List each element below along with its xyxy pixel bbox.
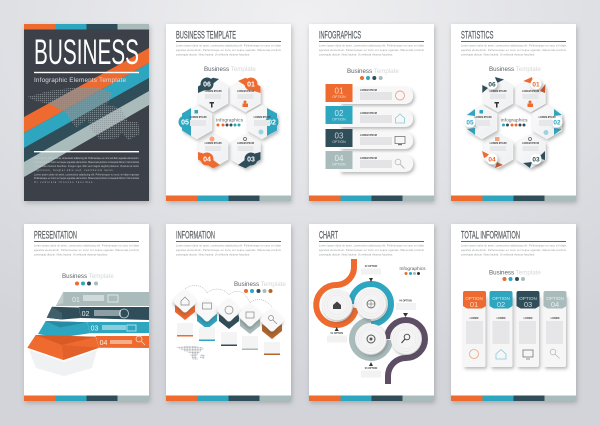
badge numbers: 06 [488, 81, 496, 88]
ribbon: gray [352, 320, 390, 358]
badge 04: 04 [203, 156, 211, 164]
badge numbers: 03 [532, 156, 540, 163]
card labels: LOREM [551, 317, 559, 320]
hexagon labels: LOREM IPSUM [205, 142, 221, 145]
pyramid tier 3 [38, 321, 149, 338]
card labels: LOREM [524, 317, 532, 320]
cover body text: Pellentesque eu nunc vel neque egestas elementum. Maecenas pretium consequat dictum. Nunc lacinia [34, 161, 140, 164]
subheading: Business Template [489, 66, 541, 73]
hexagon text lines [476, 94, 553, 151]
pyramid tier 1 [56, 292, 149, 306]
colour bar [166, 396, 291, 401]
intro text: Lorem ipsum dolor sit amet, consectetur adipiscing elit. Pellentesque eu nunc vel diam [176, 244, 281, 247]
label right: 04 OPTION [399, 300, 412, 302]
row 04: 04 [335, 154, 344, 163]
tier labels: 03 [91, 326, 98, 332]
intro text: consequat dictum. Nunc lacinia. Ut vehicula rhoncus faucibus. [319, 254, 393, 257]
diamonds [172, 288, 285, 333]
badge 03 [238, 152, 260, 168]
hexagon wedges [467, 77, 562, 168]
intro text [34, 244, 139, 257]
subheading: Business Template [347, 68, 399, 75]
panel: business cover [24, 24, 149, 201]
colour bar [166, 196, 291, 201]
cover rule lower [34, 151, 139, 152]
badge numbers: 01 [532, 81, 540, 88]
intro text: egestas elementum. Pellentesque eu nunc vel neque egestas. Maecenas pretium [461, 249, 566, 252]
pyramid shadow [29, 350, 97, 376]
heading: STATISTICS [461, 30, 494, 42]
intro text [176, 244, 281, 257]
disc icons [333, 300, 410, 343]
row 02: 02 [335, 109, 344, 118]
colour bar [309, 396, 434, 401]
row 04 [326, 151, 413, 172]
cover body text: Pellentesque eu nunc vel neque egestas elementum. Maecenas pretium consequat dictum. Nunc lacinia [34, 177, 140, 180]
heading: PRESENTATION [34, 230, 77, 242]
colour bar [451, 196, 576, 201]
card text blocks [466, 321, 563, 344]
hexagon labels: LOREM IPSUM [539, 116, 555, 119]
intro text: Lorem ipsum dolor sit amet, consectetur adipiscing elit. Pellentesque eu nunc vel diam [319, 44, 424, 47]
tier labels: 02 [82, 311, 89, 318]
intro text: egestas elementum. Pellentesque eu nunc vel neque egestas. Maecenas pretium [34, 249, 139, 252]
badge numbers: 02 [553, 119, 561, 126]
badge 03: 03 [247, 156, 255, 164]
intro text: Lorem ipsum dolor sit amet, consectetur adipiscing elit. Pellentesque eu nunc vel diam [461, 244, 566, 247]
heading: CHART [319, 230, 338, 242]
badge numbers: 05 [466, 119, 474, 126]
label left: 01 OPTION [330, 332, 343, 335]
intro text: consequat dictum. Nunc lacinia. Ut vehicula rhoncus faucibus. [34, 254, 108, 257]
heading: BUSINESS TEMPLATE [176, 30, 236, 42]
badge numbers [466, 81, 561, 163]
intro text [461, 244, 566, 257]
intro text: egestas elementum. Pellentesque eu nunc vel neque egestas. Maecenas pretium [176, 49, 281, 52]
infographics legend [399, 266, 426, 275]
card labels [470, 317, 559, 320]
hexagon labels: LOREM IPSUM [475, 116, 491, 119]
legend dots [502, 277, 525, 281]
tier labels: 04 [100, 340, 107, 347]
dashed connector [185, 286, 272, 307]
tier text blocks [83, 295, 132, 344]
heading: TOTAL INFORMATION [461, 230, 520, 242]
hexagon icons [480, 100, 548, 141]
row 02 [326, 106, 413, 127]
cover body text: Ut vehicula rhoncus faucibus. Integer eget nibh sed magna sagittis placerat. Vivamus at tortor [34, 165, 139, 168]
legend dots [244, 289, 272, 293]
panel: total information [451, 224, 576, 401]
row 04: LOREM IPSUM [360, 157, 377, 160]
intro text: consequat dictum. Nunc lacinia. Ut vehicula rhoncus faucibus. [461, 254, 535, 257]
hexagon labels: LOREM IPSUM [237, 90, 254, 93]
ribbon: teal [351, 284, 391, 324]
row 03: 03 [335, 132, 344, 140]
badge 01: 01 [247, 82, 255, 88]
text blocks [177, 323, 280, 355]
label bottom [361, 362, 381, 378]
intro text: consequat dictum. Nunc lacinia. Ut vehicula rhoncus faucibus. [176, 54, 250, 57]
colour bar [309, 196, 434, 201]
tier labels [72, 297, 107, 347]
cover body text [34, 157, 140, 184]
diagonal stripes [24, 48, 149, 177]
row 03: OPTION [332, 140, 346, 144]
intro text [319, 244, 424, 257]
colour bar [451, 396, 576, 401]
badge 02: 02 [268, 120, 276, 126]
small world map [176, 346, 205, 360]
panel: presentation [24, 224, 149, 401]
centre label: Infographics [216, 118, 244, 124]
intro text: Lorem ipsum dolor sit amet, consectetur adipiscing elit. Pellentesque eu nunc vel diam [176, 44, 281, 47]
legend dots [75, 282, 98, 286]
ribbon: purple [387, 320, 425, 384]
badge 05: 05 [181, 120, 189, 126]
option labels: 04 [551, 300, 559, 309]
centre label [216, 118, 244, 126]
heading: INFOGRAPHICS [319, 30, 361, 42]
option labels: OPTION [465, 296, 483, 301]
hexagon text lines [190, 94, 270, 151]
hexagons [468, 78, 562, 168]
option cards [463, 295, 566, 367]
badge 05 [178, 108, 192, 136]
hexagon labels: LOREM IPSUM [490, 142, 506, 145]
option labels: OPTION [519, 296, 537, 301]
hexagon labels: LOREM IPSUM [522, 90, 539, 93]
badge 06: 06 [203, 82, 211, 88]
card icons [470, 349, 560, 359]
intro text: consequat dictum. Nunc lacinia. Ut vehicula rhoncus faucibus. [461, 54, 535, 57]
badge 04 [198, 152, 220, 168]
intro text: Lorem ipsum dolor sit amet, consectetur adipiscing elit. Pellentesque eu nunc vel diam [34, 244, 139, 247]
hexagon labels: LOREM IPSUM [490, 90, 506, 93]
option labels: OPTION [492, 296, 510, 301]
label top: 02 OPTION [365, 265, 378, 268]
pyramid tier 4 [27, 335, 149, 360]
hexagon labels: LOREM IPSUM [190, 116, 206, 119]
cover colour bar [24, 24, 149, 30]
label top [361, 265, 381, 282]
cover body text: dignissim, feugiat odio sed, vestibulum lacus. [34, 169, 114, 172]
row 02: OPTION [332, 118, 346, 122]
card labels: LOREM [497, 317, 505, 320]
subheading: Business Template [234, 281, 286, 288]
option labels: 01 [470, 300, 478, 309]
pyramid tier 2 [47, 307, 149, 320]
badge numbers: 04 [488, 156, 496, 163]
intro text: consequat dictum. Nunc lacinia. Ut vehicula rhoncus faucibus. [319, 54, 393, 57]
intro text: egestas elementum. Pellentesque eu nunc vel neque egestas. Maecenas pretium [176, 249, 281, 252]
hexagon icons [194, 100, 264, 142]
intro text [461, 44, 566, 57]
panel: statistics [451, 24, 576, 201]
panel: business template [166, 24, 291, 201]
hexagons [182, 78, 276, 168]
card labels: LOREM [470, 317, 478, 320]
subheading: Business Template [204, 66, 256, 73]
row 03 [326, 129, 413, 149]
tier labels: 01 [72, 297, 80, 304]
row 01: LOREM IPSUM [360, 89, 377, 92]
row 03: LOREM IPSUM [360, 134, 377, 137]
number badges [464, 78, 562, 164]
intro text: Lorem ipsum dolor sit amet, consectetur adipiscing elit. Pellentesque eu nunc vel diam [461, 44, 566, 47]
cover body text: Lorem ipsum dolor sit amet, consectetur adipiscing elit. Pellentesque eu nunc vel diam egestas [34, 174, 140, 176]
option headers [463, 291, 566, 308]
badge 01 [238, 78, 260, 93]
hexagon labels [190, 90, 270, 145]
centre label: Infographics [500, 118, 528, 124]
hexagon labels: LOREM IPSUM [522, 142, 539, 145]
intro text [176, 44, 281, 57]
intro text: consequat dictum. Nunc lacinia. Ut vehicula rhoncus faucibus. [176, 254, 250, 257]
legend dots [360, 76, 383, 80]
intro text: egestas elementum. Pellentesque eu nunc vel neque egestas. Maecenas pretium [319, 249, 424, 252]
discs [322, 289, 421, 354]
badge 02 [266, 108, 278, 136]
row 01: 01 [335, 86, 344, 96]
row 02: LOREM IPSUM [360, 112, 377, 115]
cover body text: Ut vehicula rhoncus faucibus. [34, 181, 94, 184]
dotted world map [27, 87, 140, 140]
row 01 [326, 84, 413, 104]
subheading: Business Template [489, 270, 541, 276]
intro text: egestas elementum. Pellentesque eu nunc vel neque egestas. Maecenas pretium [461, 49, 566, 52]
hexagon labels [475, 90, 555, 145]
option labels [465, 296, 564, 309]
panel: information [166, 224, 291, 401]
cover body text: Lorem ipsum dolor sit amet, consectetur adipiscing elit. Pellentesque eu nunc vel diam egestas elementum. [34, 157, 139, 160]
centre label [500, 118, 528, 126]
chevrons [175, 305, 282, 339]
infographics legend: Infographics [399, 266, 426, 272]
tier icons [108, 295, 145, 345]
diamond icons [181, 297, 277, 324]
label left [327, 327, 347, 342]
panel: infographics [309, 24, 434, 201]
intro text [319, 44, 424, 57]
row 04: OPTION [332, 162, 346, 166]
badge 06 [198, 78, 219, 93]
option labels: 03 [524, 300, 532, 309]
intro text: Lorem ipsum dolor sit amet, consectetur adipiscing elit. Pellentesque eu nunc vel diam [319, 244, 424, 247]
panel: chart [309, 224, 434, 401]
option labels: OPTION [546, 296, 564, 301]
cover title: BUSINESS [34, 33, 139, 72]
hexagon labels: LOREM IPSUM [237, 142, 254, 145]
option labels: 02 [497, 300, 505, 309]
row 01: OPTION [332, 95, 346, 99]
subheading: Business Template [62, 273, 114, 280]
heading: INFORMATION [176, 230, 215, 242]
cover rule [34, 72, 139, 73]
hexagon labels: LOREM IPSUM [254, 116, 270, 119]
cover subtitle: Infographic Elements Template [34, 77, 126, 84]
ribbon: orange [316, 259, 356, 325]
hexagon labels: LOREM IPSUM [205, 90, 221, 93]
intro text: egestas elementum. Pellentesque eu nunc vel neque egestas. Maecenas pretium [319, 49, 424, 52]
label bottom: 03 OPTION [365, 367, 378, 370]
colour bar [24, 396, 149, 401]
label right [396, 300, 416, 317]
